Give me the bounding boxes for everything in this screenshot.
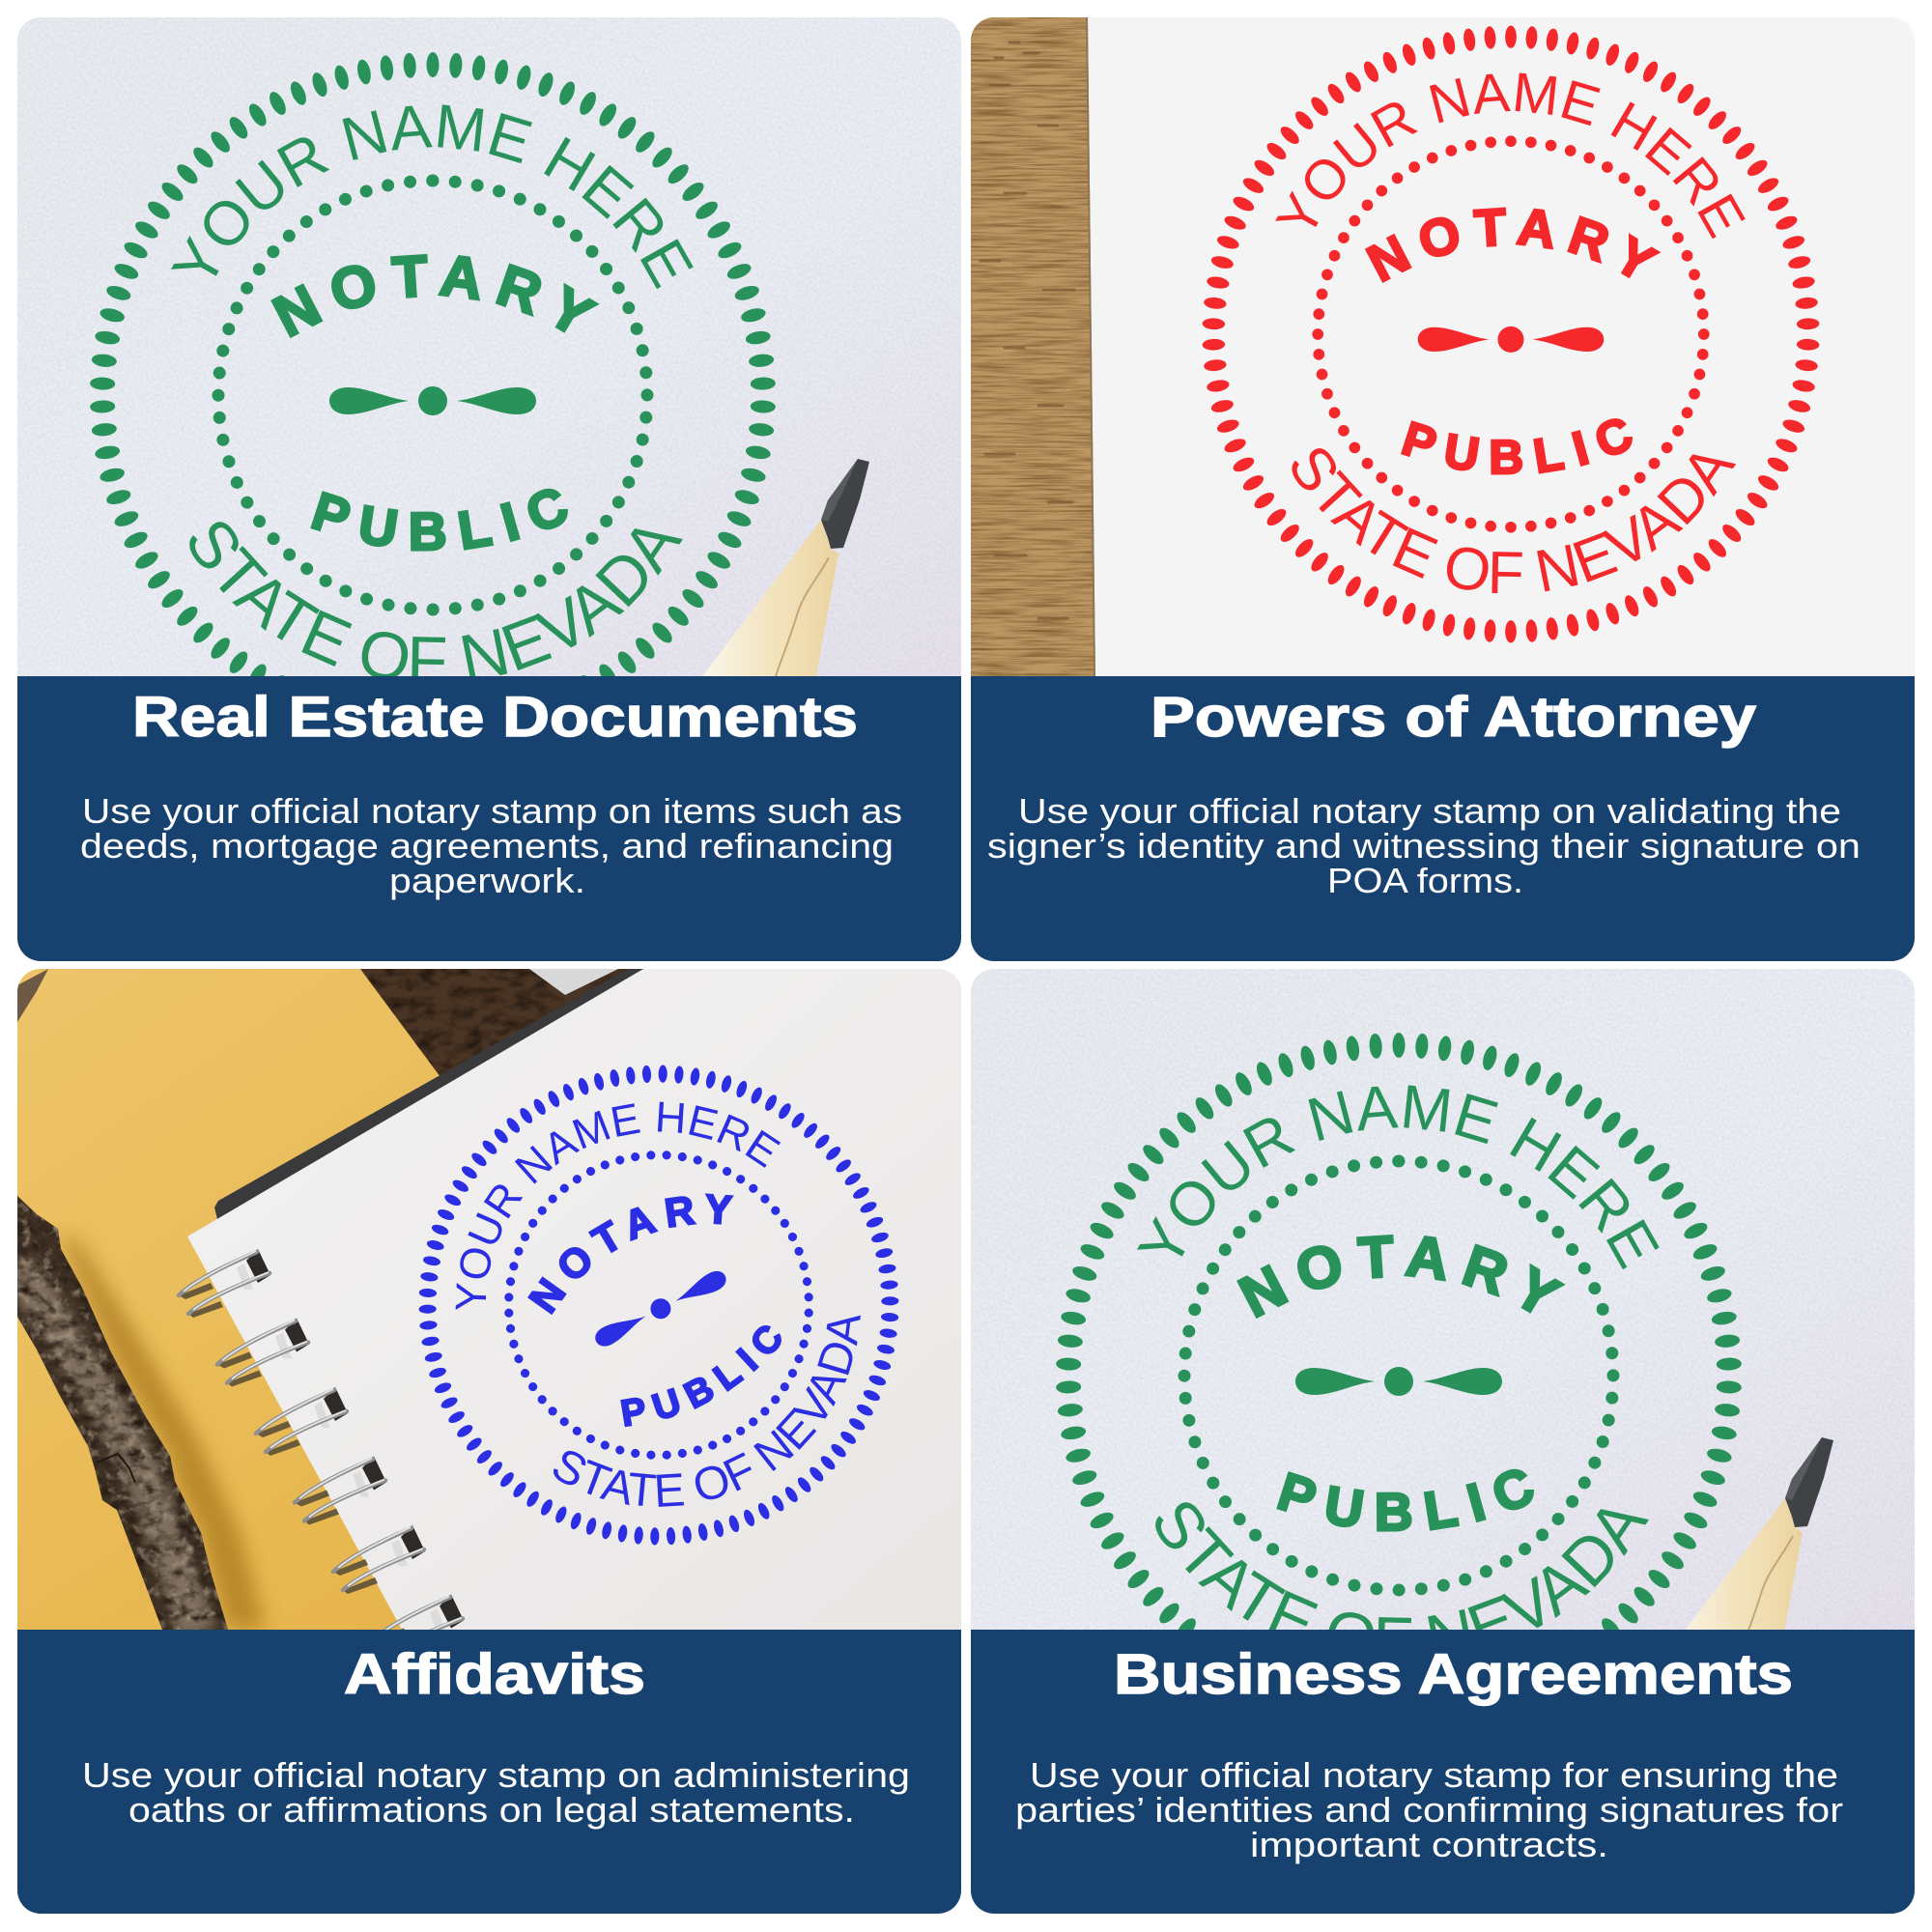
- stamp: red notary seal: YOUR NAME HERE: [1275, 73, 1746, 240]
- photo: blue stamp on spiral notebook: [17, 942, 1021, 1668]
- panel: real estate documents: [17, 17, 961, 961]
- description text: [80, 791, 902, 900]
- small twig corner: [17, 969, 48, 1022]
- photo: red stamp on white card over wood: [971, 17, 1915, 676]
- heading: Business Agreements: [1114, 1643, 1793, 1706]
- description text: [82, 1755, 910, 1830]
- stamp: red notary seal: PUBLIC: [1401, 418, 1633, 475]
- description text: Use your official notary stamp on validating the: [1018, 791, 1841, 831]
- stamp: green notary seal: PUBLIC: [310, 489, 568, 552]
- description text: [987, 791, 1861, 900]
- caption block: [17, 676, 961, 961]
- description text: deeds, mortgage agreements, and refinancing: [80, 826, 894, 866]
- stamp: green notary seal: STATE OF NEVADA: [189, 522, 683, 676]
- description text: oaths or affirmations on legal statements.: [128, 1790, 855, 1830]
- heading: Affidavits: [344, 1643, 645, 1706]
- description text: parties’ identities and confirming signatures for: [1015, 1790, 1843, 1830]
- caption block: [971, 1630, 1915, 1914]
- description text: important contracts.: [1250, 1825, 1608, 1864]
- stamp: green notary seal: YOUR NAME HERE: [171, 104, 694, 290]
- photo: green stamp on paper with pencil: [971, 969, 1915, 1763]
- description text: Use your official notary stamp on administering: [82, 1755, 910, 1795]
- stamp: green notary seal: STATE OF NEVADA: [1136, 1486, 1662, 1678]
- stamp: blue notary seal: STATE OF NEVADA: [554, 1316, 861, 1507]
- stamp: blue notary seal: NOTARY: [527, 1193, 734, 1316]
- stamp: green notary seal: [1015, 988, 1782, 1763]
- description text: Use your official notary stamp for ensuring the: [1030, 1755, 1838, 1795]
- wood knots and grain flecks: [980, 43, 1074, 618]
- stamp: red notary seal: [1165, 0, 1857, 683]
- dark woven mat: [360, 969, 643, 1077]
- stamp: green notary seal: PUBLIC: [1271, 1449, 1555, 1542]
- stamp: green notary seal: NOTARY: [1230, 1223, 1581, 1337]
- description text: paperwork.: [389, 861, 585, 900]
- heading: Real Estate Documents: [132, 686, 858, 749]
- notebook back cover edge: [214, 966, 662, 1219]
- icon: pencil: [702, 459, 869, 676]
- stamp: red notary seal: STATE OF NEVADA: [1292, 448, 1737, 593]
- stamp: blue notary seal: [297, 942, 1021, 1668]
- panel: business agreements: [971, 969, 1915, 1914]
- description text: [1015, 1755, 1843, 1864]
- stamp: blue notary seal: YOUR NAME HERE: [456, 1101, 781, 1310]
- description text: POA forms.: [1327, 861, 1523, 900]
- stamp: green notary seal: NOTARY: [270, 253, 600, 338]
- photo: green stamp on paper with pencil: [17, 17, 961, 676]
- spiral binding coils: [179, 1249, 464, 1663]
- description text: Use your official notary stamp on items such as: [82, 791, 902, 831]
- caption block: [17, 1630, 961, 1914]
- heading: Powers of Attorney: [1151, 686, 1756, 749]
- stamp: green notary seal: [90, 52, 776, 676]
- stamp: blue notary seal: PUBLIC: [620, 1325, 781, 1428]
- caption block: [971, 676, 1915, 961]
- stamp: red notary seal: NOTARY: [1364, 207, 1662, 283]
- notebook page: [187, 969, 961, 1630]
- description text: signer’s identity and witnessing their signature on: [987, 826, 1861, 866]
- stamp: green notary seal: YOUR NAME HERE: [1137, 1085, 1660, 1269]
- twig shadow: [58, 1229, 266, 1630]
- panel: powers of attorney: [971, 17, 1915, 961]
- icon: pencil: [1666, 1437, 1833, 1655]
- twig: [17, 1188, 240, 1633]
- panel: affidavits: [17, 942, 1021, 1914]
